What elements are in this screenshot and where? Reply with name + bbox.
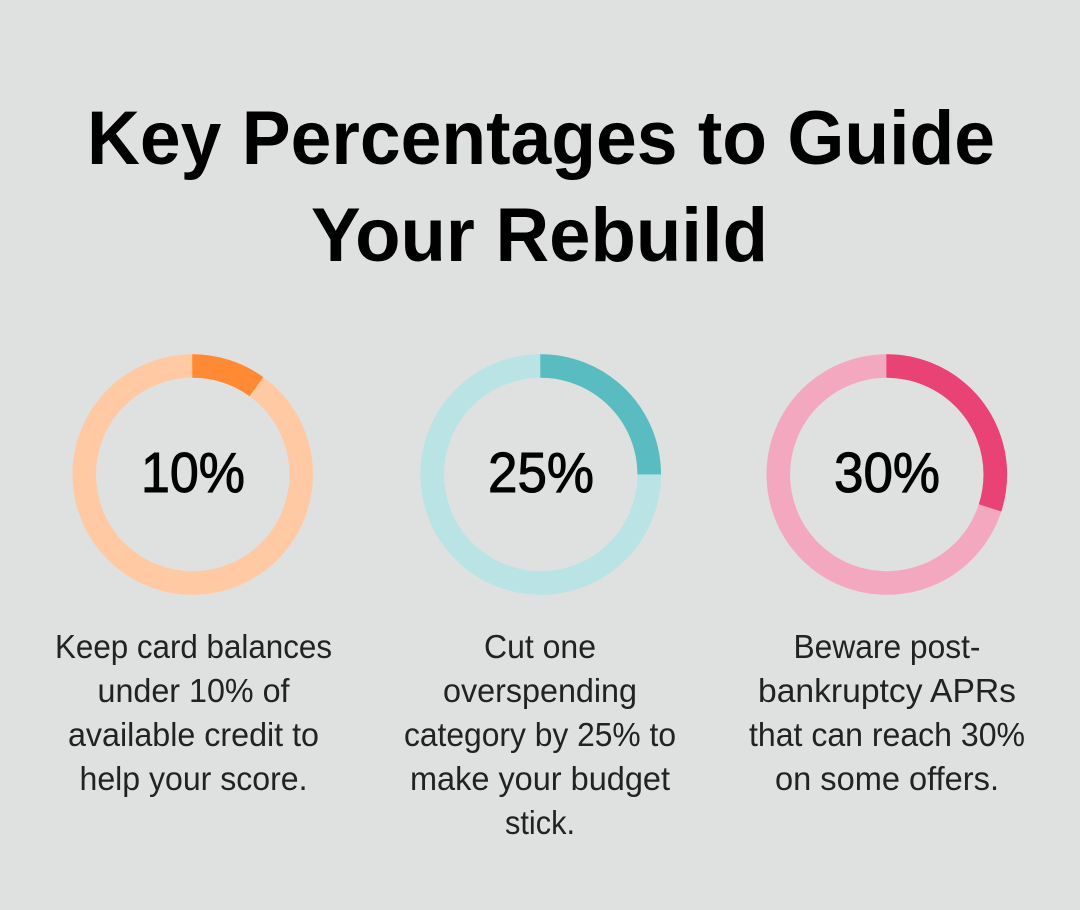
text: card balances: Keep card balances (55, 628, 332, 665)
title: Your Rebuild (311, 193, 768, 278)
title (87, 96, 995, 278)
text: card balances: under 10% of (98, 672, 290, 709)
text: overspending: overspending (443, 672, 637, 709)
text: APRs: on some offers. (775, 760, 999, 797)
donut chart: 30% (778, 366, 995, 583)
text: overspending: Cut one (484, 628, 596, 665)
donut chart: 25% (432, 366, 649, 583)
text: card balances: available credit to (68, 716, 319, 753)
text: APRs: that can reach 30% (749, 716, 1025, 753)
title: Key Percentages to Guide (87, 96, 995, 181)
text: APRs (749, 628, 1025, 797)
text: overspending: stick. (505, 804, 575, 841)
donut chart: 30%: 30% (834, 441, 940, 505)
panel: 25 percent (404, 366, 676, 841)
text: card balances (55, 628, 332, 797)
panel: 30 percent (749, 366, 1025, 797)
text: card balances: help your score. (80, 760, 308, 797)
text: overspending: category by 25% to (404, 716, 676, 753)
text: overspending: make your budget (410, 760, 670, 797)
text: APRs: bankruptcy APRs (758, 672, 1016, 709)
donut chart: 25%: 25% (488, 441, 594, 505)
panel: 10 percent (55, 366, 332, 797)
text: APRs: Beware post- (794, 628, 980, 665)
text: overspending (404, 628, 676, 841)
donut chart: 10% (84, 366, 301, 583)
donut chart: 10%: 10% (141, 441, 245, 505)
